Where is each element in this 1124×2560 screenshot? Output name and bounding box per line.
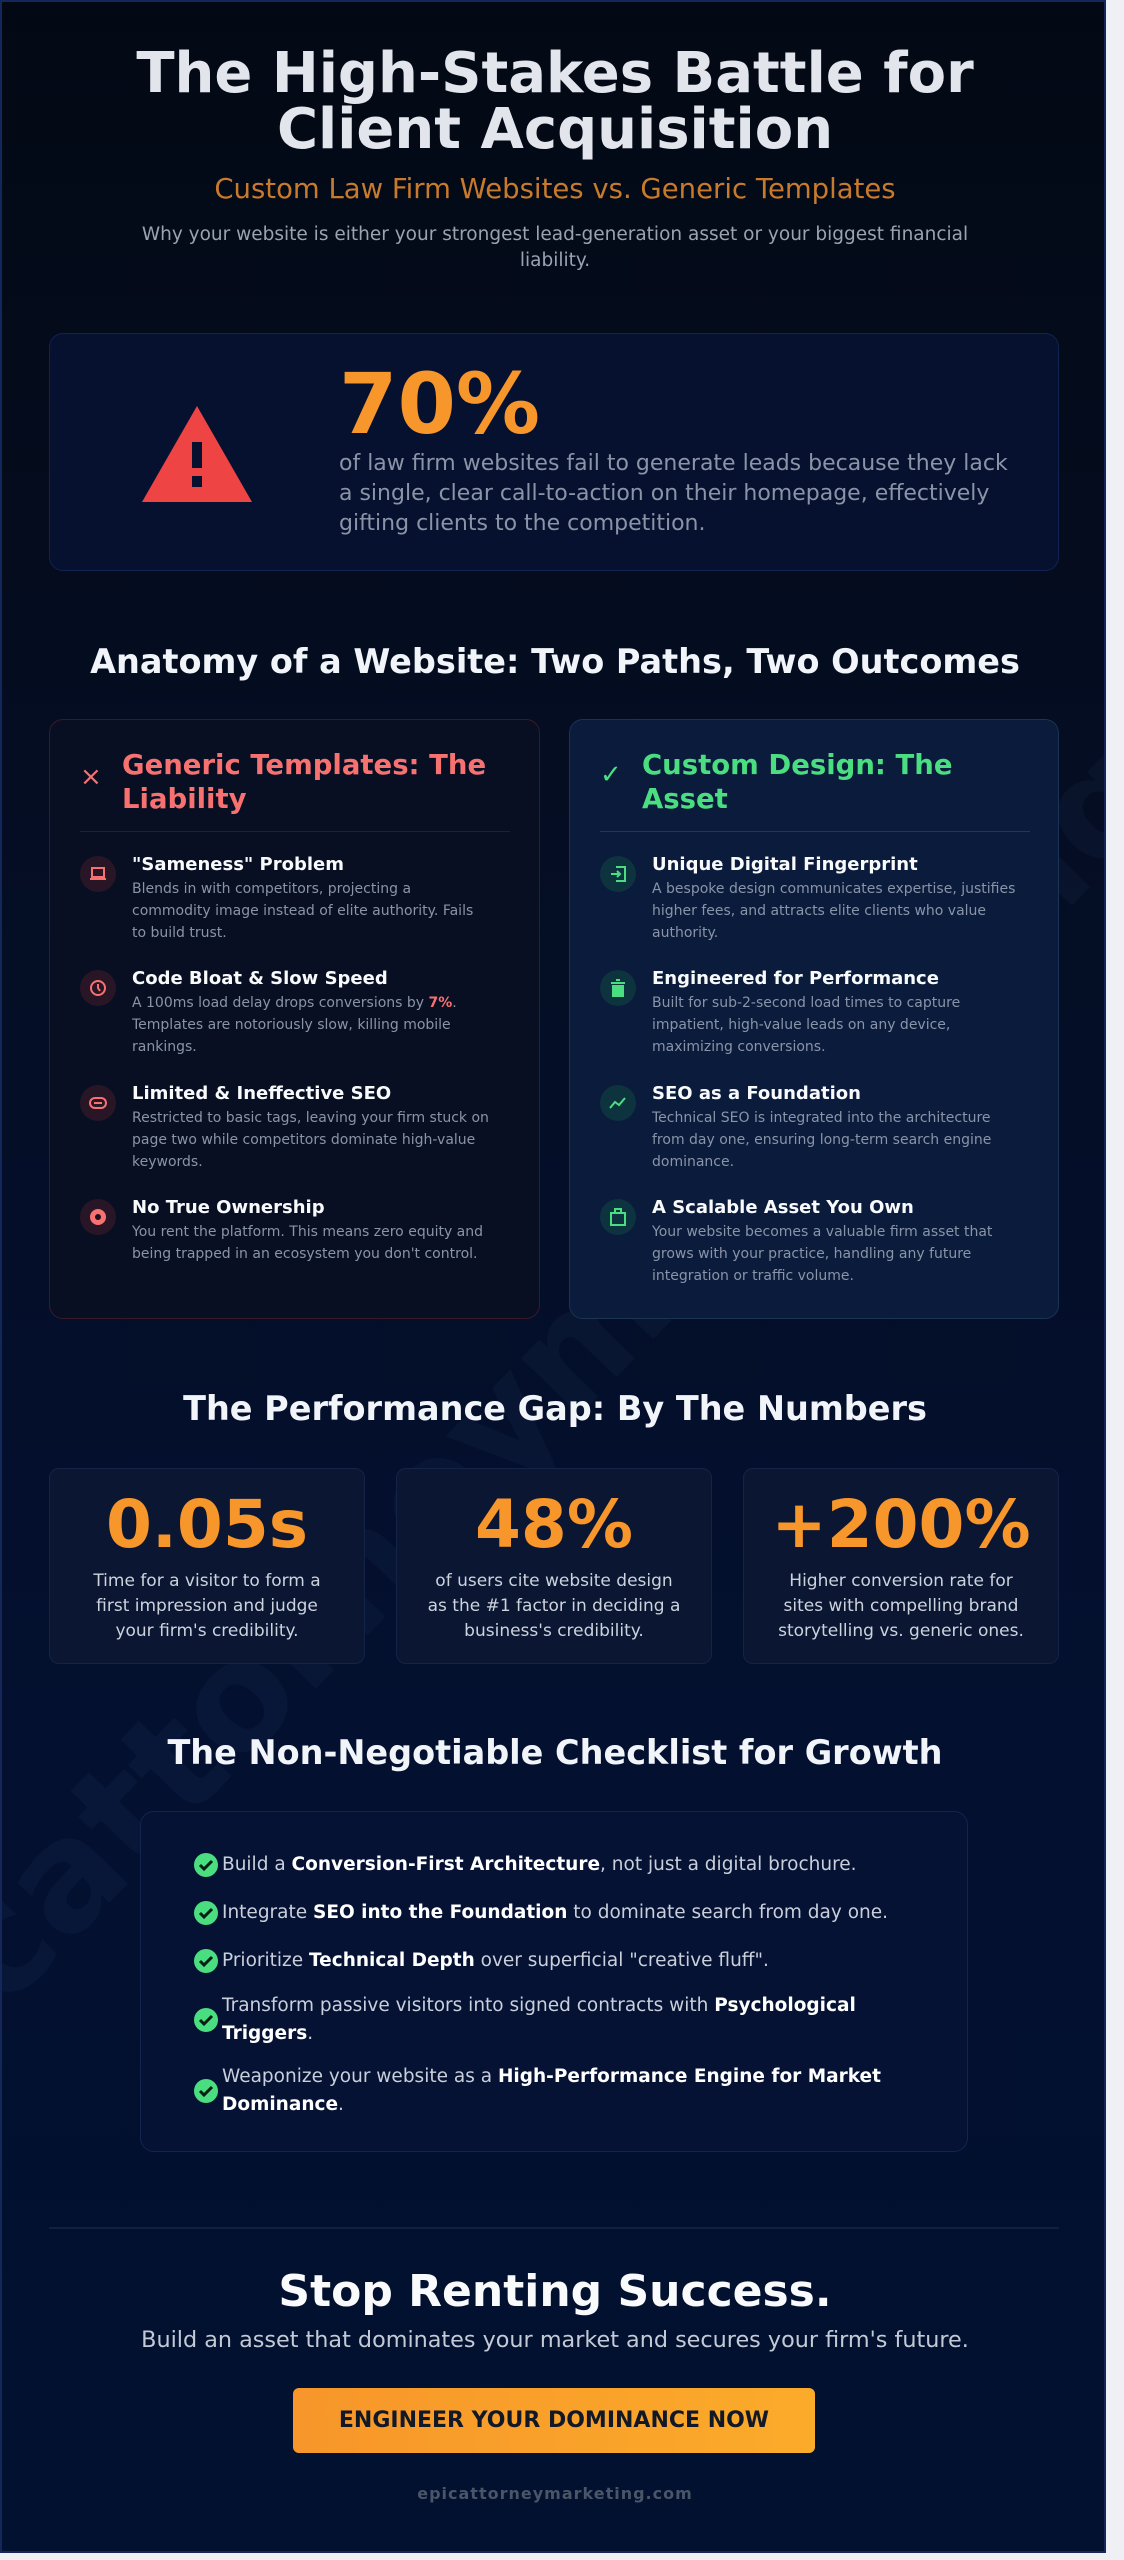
panel: generic templates	[49, 719, 540, 1319]
item 5: Weaponize your website as a High-Performance Engine for Market Dominance.	[222, 2066, 881, 2115]
big number: 70%	[339, 355, 540, 453]
stat: 0.05s: Time for a visitor to form a first impression and judge your firm's credibility.	[93, 1571, 321, 1641]
panel: checklist	[140, 1811, 968, 2152]
header: Generic Templates: The Liability	[122, 749, 486, 815]
item: ownership	[80, 1197, 483, 1262]
header: ×	[80, 762, 102, 792]
heading: performance gap: The Performance Gap: By The Numbers	[183, 1389, 927, 1428]
item: scalable asset: A Scalable Asset You Own	[652, 1197, 914, 1218]
tagline: Why your website is either your strongest lead-generation asset or your biggest financial liability.	[142, 224, 968, 271]
title	[136, 41, 974, 162]
icon: warning triangle	[142, 406, 252, 502]
item: seo: Limited & Ineffective SEO	[132, 1083, 391, 1104]
item: scalable asset	[600, 1197, 992, 1284]
subtitle: Custom Law Firm Websites vs. Generic Templates	[214, 173, 896, 205]
item: fingerprint	[600, 854, 1015, 941]
title: The High-Stakes Battle for	[136, 41, 974, 106]
description: of law firm websites fail to generate leads because they lack a single, clear call-to-action on their homepage, effectively gifting clients to the competition.	[339, 451, 1008, 536]
stat: +200%	[743, 1468, 1059, 1664]
item: sameness	[80, 854, 473, 941]
stat: 48%: of users cite website design as the #1 factor in deciding a business's credibility.	[428, 1571, 680, 1641]
item 3: Prioritize Technical Depth over superficial "creative fluff".	[222, 1950, 769, 1971]
item: performance: Built for sub-2-second load times to capture impatient, high-value leads on any device, maximizing conversions.	[652, 995, 960, 1055]
stat: 48%: 48%	[475, 1486, 633, 1563]
item: scalable asset: Your website becomes a valuable firm asset that grows with your practice, handling any future integration or traffic volume.	[652, 1224, 992, 1284]
item: fingerprint: A bespoke design communicates expertise, justifies higher fees, and attracts elite clients who value authority.	[652, 881, 1015, 941]
cta button	[293, 2388, 815, 2453]
footer url: epicattorneymarketing.com	[417, 2484, 693, 2503]
item: performance: Engineered for Performance	[652, 968, 939, 989]
panel: 70% stat	[49, 333, 1059, 571]
stat: 0.05s	[49, 1468, 365, 1664]
item: seo	[80, 1083, 489, 1170]
item: seo foundation: Technical SEO is integrated into the architecture from day one, ensuring long-term search engine dominance.	[652, 1110, 991, 1170]
item: ownership: You rent the platform. This means zero equity and being trapped in an ecosystem you don't control.	[132, 1224, 483, 1262]
item: code bloat: Code Bloat & Slow Speed	[132, 968, 388, 989]
title: Client Acquisition	[277, 97, 833, 162]
item: code bloat	[80, 968, 457, 1055]
stat: +200%: Higher conversion rate for sites with compelling brand storytelling vs. generic ones.	[778, 1571, 1024, 1641]
heading: anatomy: Anatomy of a Website: Two Paths, Two Outcomes	[90, 642, 1020, 681]
item: performance	[600, 968, 960, 1055]
item: code bloat: A 100ms load delay drops conversions by 7%. Templates are notoriously slow, killing mobile rankings.	[132, 995, 457, 1055]
panel: custom design	[569, 719, 1059, 1319]
item 1: Build a Conversion-First Architecture, not just a digital brochure.	[222, 1854, 857, 1875]
cta button: ENGINEER YOUR DOMINANCE NOW	[339, 2408, 769, 2433]
stat: +200%: +200%	[771, 1486, 1031, 1563]
item: sameness: "Sameness" Problem	[132, 854, 344, 875]
item 4: Transform passive visitors into signed contracts with Psychological Triggers.	[222, 1995, 856, 2044]
heading: checklist: The Non-Negotiable Checklist for Growth	[167, 1733, 943, 1772]
item: seo: Restricted to basic tags, leaving your firm stuck on page two while competitors dominate high-value keywords.	[132, 1110, 489, 1170]
item: sameness: Blends in with competitors, projecting a commodity image instead of elite authority. Fails to build trust.	[132, 881, 473, 941]
item: ownership: No True Ownership	[132, 1197, 325, 1218]
header: Custom Design: The Asset	[642, 749, 952, 815]
stat: 48%	[396, 1468, 712, 1664]
item: seo foundation: SEO as a Foundation	[652, 1083, 861, 1104]
header: ✓	[600, 760, 622, 790]
cta subtext: Build an asset that dominates your market and secures your firm's future.	[141, 2327, 969, 2353]
stat: 0.05s: 0.05s	[106, 1486, 308, 1563]
cta heading: Stop Renting Success.	[278, 2266, 832, 2317]
item: seo foundation	[600, 1083, 991, 1170]
item: fingerprint: Unique Digital Fingerprint	[652, 854, 918, 875]
item 2: Integrate SEO into the Foundation to dominate search from day one.	[222, 1902, 888, 1923]
